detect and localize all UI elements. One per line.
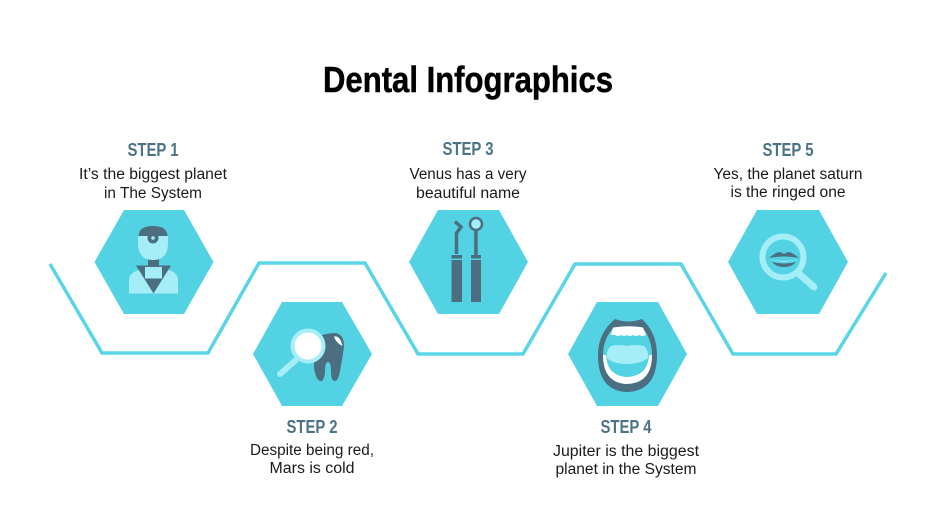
step 4 text: STEP 4: [600, 416, 652, 437]
step 3 text: [410, 138, 527, 202]
step 5 text: [714, 139, 862, 201]
step 1 text: [79, 139, 228, 202]
step 4 text: Jupiter is the biggest: [553, 443, 700, 460]
step 3 text: STEP 3: [442, 138, 494, 159]
step 1 text: STEP 1: [128, 139, 178, 160]
step 2 text: Mars is cold: [270, 460, 354, 477]
step 2 hexagon: [253, 302, 372, 406]
step 1 hexagon: [94, 210, 214, 314]
icon: lips under magnifier: [762, 236, 814, 287]
step 5 text: Yes, the planet saturn: [714, 166, 862, 183]
step 4 hexagon: [568, 302, 687, 406]
step 3 text: beautiful name: [416, 185, 520, 202]
step 5 hexagon: [728, 210, 848, 314]
step 4 text: [553, 416, 700, 478]
step 5 text: STEP 5: [762, 139, 814, 160]
icon: dental tools: [452, 218, 482, 302]
step 2 text: Despite being red,: [250, 442, 374, 459]
step 2 text: [250, 416, 374, 477]
step 1 text: in The System: [104, 185, 202, 202]
step 2 text: STEP 2: [286, 416, 338, 437]
step 3 text: Venus has a very: [410, 166, 527, 183]
icon: open mouth: [598, 319, 657, 392]
zigzag connector line: [50, 263, 886, 354]
step 4 text: planet in the System: [556, 461, 696, 478]
step 3 hexagon: [409, 210, 528, 314]
icon: tooth with magnifier: [280, 330, 344, 381]
step 1 text: It’s the biggest planet: [79, 166, 228, 183]
icon: dentist: [129, 226, 178, 294]
title: Dental Infographics: [323, 59, 613, 100]
step 5 text: is the ringed one: [730, 184, 846, 201]
